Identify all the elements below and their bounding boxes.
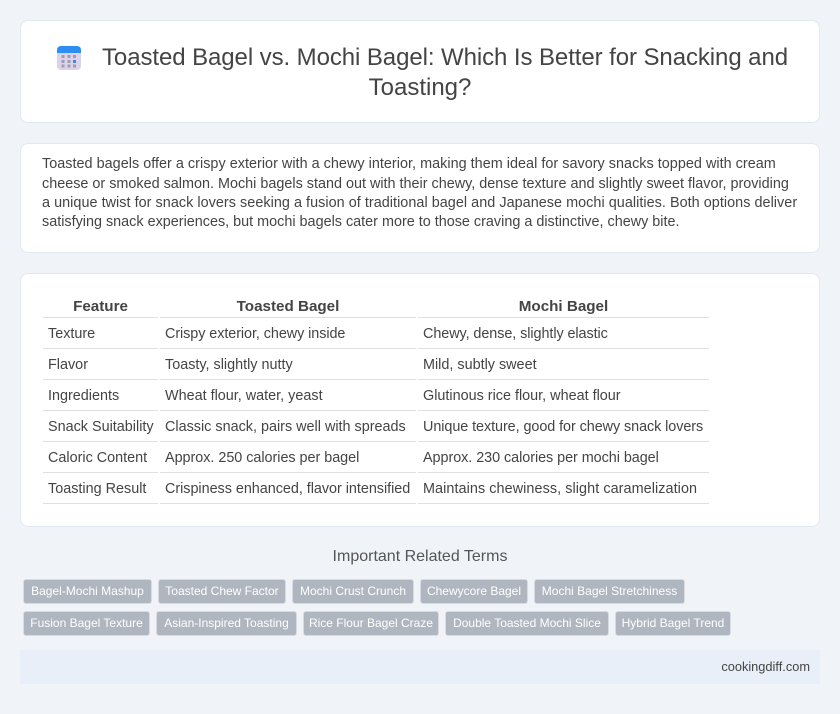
related terms heading: Important Related Terms — [333, 548, 507, 565]
comparison table: Mochi Bagel — [519, 298, 608, 315]
comparison table: Snack Suitability — [48, 419, 154, 435]
related terms tags: Hybrid Bagel Trend — [622, 616, 724, 630]
comparison table: Approx. 250 calories per bagel — [165, 450, 359, 466]
description text: Toasted bagels offer a crispy exterior with a chewy interior, making them ideal for savory snacks topped with cream — [42, 156, 776, 172]
comparison table: Crispy exterior, chewy inside — [165, 326, 345, 342]
related terms tags: Fusion Bagel Texture — [30, 616, 143, 630]
footer bar — [20, 650, 820, 684]
title: Toasting? — [369, 74, 471, 101]
description text: satisfying snack experiences, but mochi bagels cater more to those craving a distinctive, chewy bite. — [42, 214, 680, 230]
related terms tags: Mochi Crust Crunch — [300, 584, 406, 598]
related terms tags: Asian-Inspired Toasting — [164, 616, 289, 630]
description card — [20, 143, 820, 253]
comparison table: Glutinous rice flour, wheat flour — [423, 388, 621, 404]
footer source text: cookingdiff.com — [721, 659, 810, 674]
comparison table: Flavor — [48, 357, 88, 373]
comparison table: Wheat flour, water, yeast — [165, 388, 323, 404]
description text: a unique twist for snack lovers seeking a fusion of traditional bagel and Japanese mochi qualities. Both options deliver — [42, 195, 797, 211]
comparison table: Crispiness enhanced, flavor intensified — [165, 481, 410, 497]
comparison table: Ingredients — [48, 388, 119, 404]
comparison table: Maintains chewiness, slight caramelization — [423, 481, 697, 497]
related terms tags — [23, 579, 731, 636]
related terms tags: Chewycore Bagel — [427, 584, 521, 598]
header card — [20, 20, 820, 123]
comparison table: Toasty, slightly nutty — [165, 357, 293, 373]
comparison table: Toasted Bagel — [237, 298, 339, 315]
comparison table: Unique texture, good for chewy snack lovers — [423, 419, 703, 435]
related terms tags: Double Toasted Mochi Slice — [453, 616, 601, 630]
comparison table: Toasting Result — [48, 481, 146, 497]
related terms tags: Bagel-Mochi Mashup — [31, 584, 144, 598]
related terms tags: Mochi Bagel Stretchiness — [542, 584, 677, 598]
comparison table: Texture — [48, 326, 95, 342]
comparison table — [43, 298, 709, 504]
table card — [20, 273, 820, 527]
related terms tags: Rice Flour Bagel Craze — [309, 616, 433, 630]
comparison table: Feature — [73, 298, 128, 315]
title: Toasted Bagel vs. Mochi Bagel: Which Is Better for Snacking and — [102, 44, 788, 71]
description text — [42, 156, 797, 230]
related terms tags: Toasted Chew Factor — [165, 584, 279, 598]
description text: cheese or smoked salmon. Mochi bagels stand out with their chewy, dense texture and slightly sweet flavor, providing — [42, 176, 789, 192]
comparison table: Chewy, dense, slightly elastic — [423, 326, 608, 342]
comparison table: Classic snack, pairs well with spreads — [165, 419, 406, 435]
icon: calendar — [57, 46, 81, 70]
comparison table: Approx. 230 calories per mochi bagel — [423, 450, 659, 466]
title — [102, 44, 788, 101]
comparison table: Mild, subtly sweet — [423, 357, 537, 373]
comparison table: Caloric Content — [48, 450, 147, 466]
